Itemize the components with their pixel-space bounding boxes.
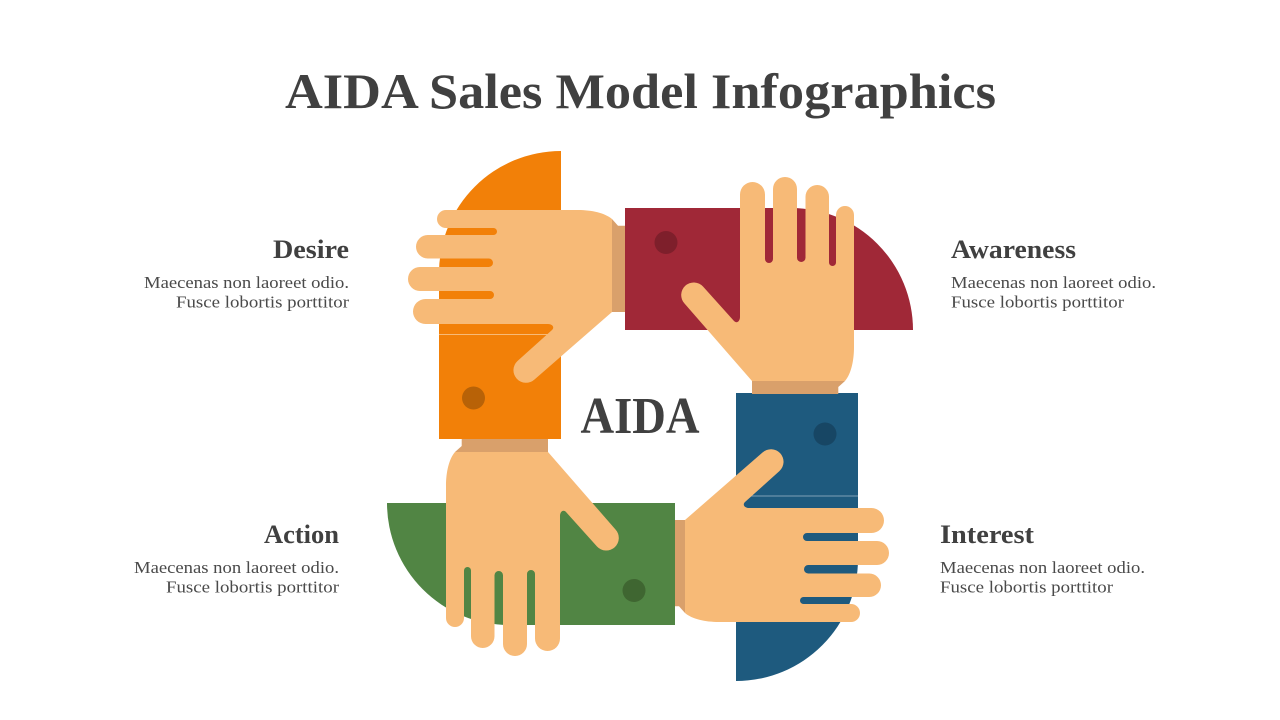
sleeve: orange — [439, 151, 561, 439]
text block: Desire: Maecenas non laoreet odio. — [144, 273, 349, 292]
text block: Interest: Maecenas non laoreet odio. — [940, 558, 1145, 577]
sleeve: red — [625, 208, 913, 330]
text block: Interest: Fusce lobortis porttitor — [940, 578, 1113, 596]
sleeve: green — [387, 503, 675, 625]
text block: Awareness: Fusce lobortis porttitor — [951, 292, 1124, 312]
text block: Awareness: Awareness — [951, 235, 1076, 264]
text block: Desire: Fusce lobortis porttitor — [176, 292, 349, 312]
title: AIDA Sales Model Infographics — [285, 63, 996, 119]
hand: over green sleeve — [446, 439, 619, 656]
center label: AIDA: AIDA — [580, 388, 700, 445]
text block: Action: Action — [264, 520, 340, 549]
hand: over orange sleeve — [408, 210, 625, 383]
text block: Interest: Interest — [940, 520, 1034, 549]
hand: over red sleeve — [681, 177, 854, 394]
text block: Action: Fusce lobortis porttitor — [166, 578, 339, 596]
text block: Awareness: Maecenas non laoreet odio. — [951, 273, 1156, 292]
text block: Desire — [144, 235, 349, 312]
text block: Desire: Desire — [273, 235, 349, 264]
sleeve: blue — [736, 393, 858, 681]
text block: Action — [134, 520, 340, 596]
text block: Interest — [940, 520, 1145, 596]
hand: over blue sleeve — [675, 449, 889, 622]
text block: Awareness — [951, 235, 1156, 312]
text block: Action: Maecenas non laoreet odio. — [134, 558, 339, 577]
